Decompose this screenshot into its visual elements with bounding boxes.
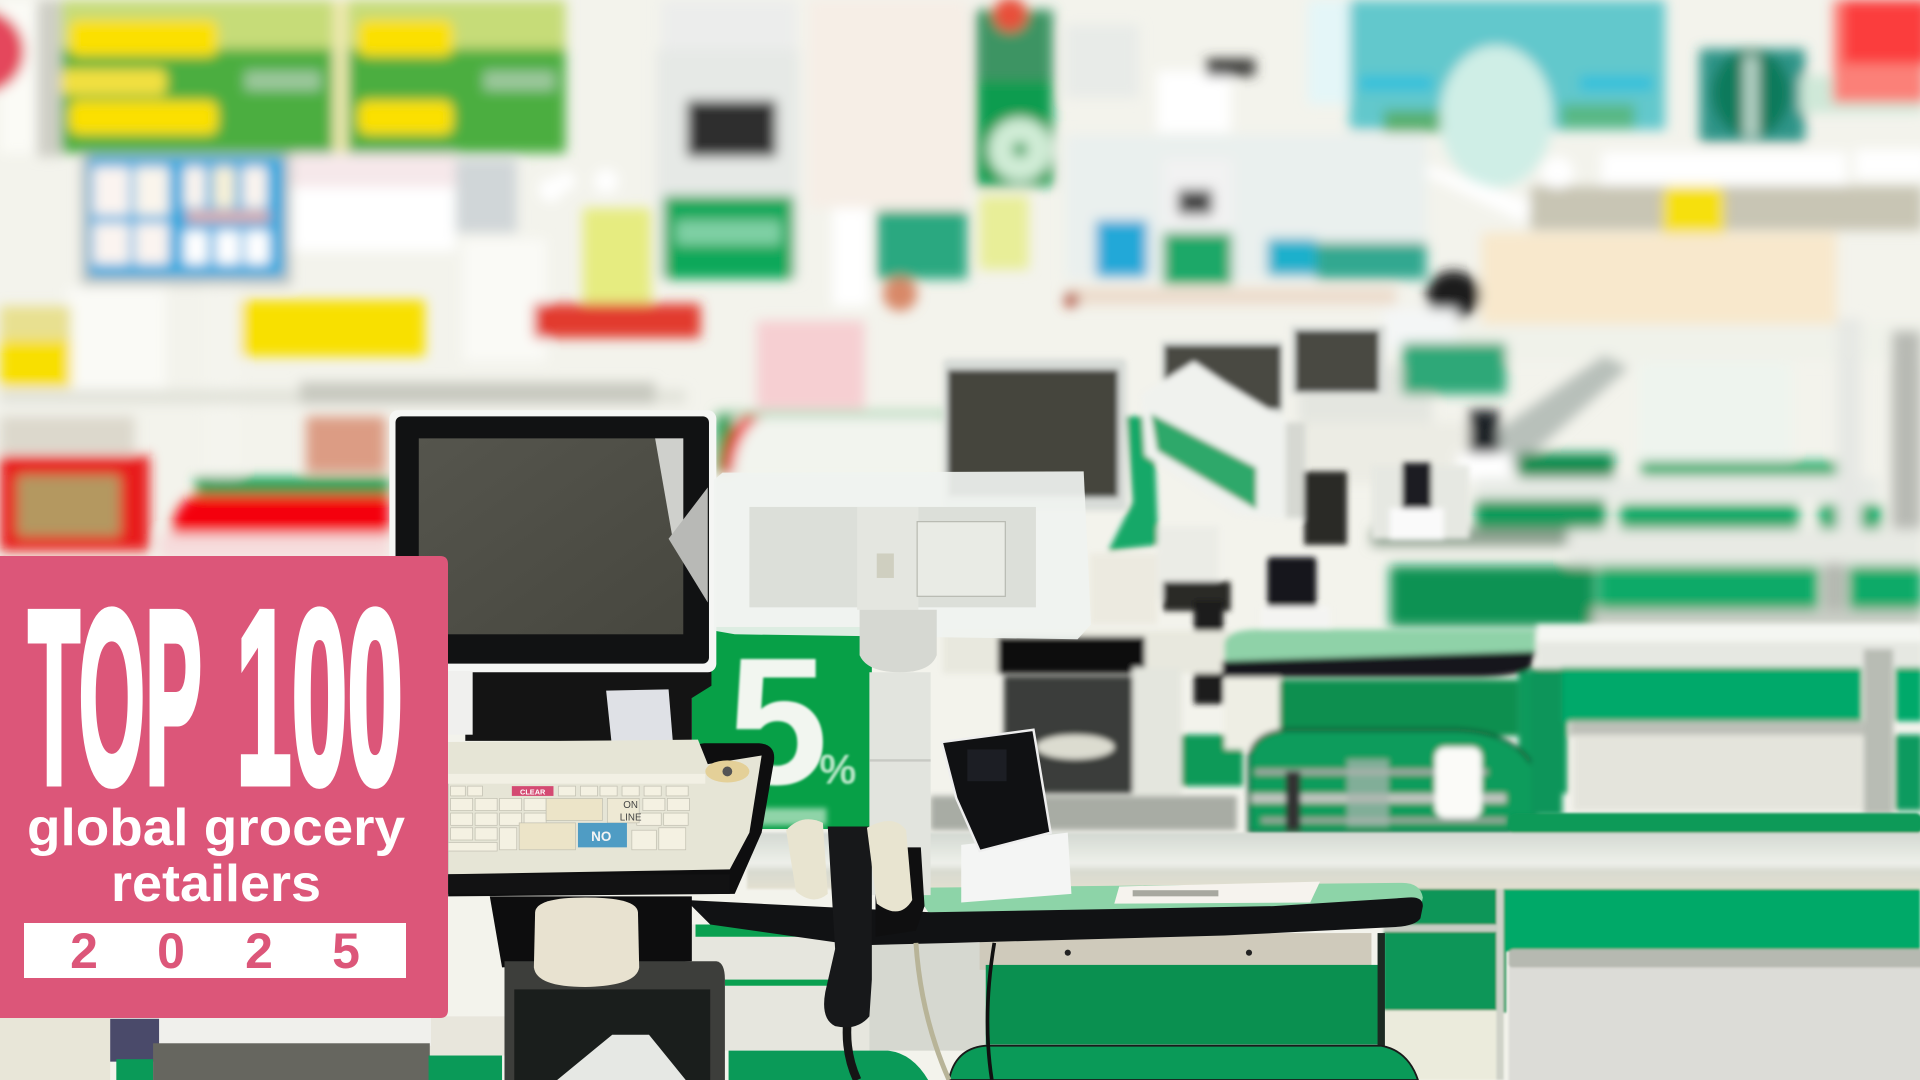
second counter — [931, 629, 1567, 830]
left hanging signs — [0, 0, 566, 157]
receipt scanner and paper roll — [504, 898, 725, 1080]
green 5% promo board: % — [819, 746, 856, 793]
mid-distance counters — [931, 326, 1920, 833]
keypad keys — [448, 786, 689, 851]
green 5% promo board: 5 — [727, 621, 828, 823]
silver rail — [747, 833, 1920, 889]
blurred store background — [0, 0, 1920, 627]
third lane scanner — [1163, 557, 1330, 704]
blue promo sign — [81, 153, 291, 285]
year strip: 5 — [332, 923, 360, 979]
lane panel — [1384, 813, 1920, 1080]
main monitor — [389, 410, 716, 749]
badge panel — [0, 556, 448, 1018]
subheading — [27, 799, 405, 913]
front-right lane upper — [1531, 624, 1920, 816]
keyboard terminal: ON — [623, 800, 638, 811]
pole customer display — [714, 471, 1091, 895]
year strip: 2 — [245, 923, 273, 979]
subheading: global grocery — [27, 799, 405, 857]
ceiling lights and top-right signs — [1157, 0, 1920, 242]
white glow and lights — [67, 153, 651, 484]
lower centre background — [0, 924, 986, 1080]
first counter — [686, 882, 1423, 1080]
centre hanging sign — [656, 0, 967, 311]
keyboard terminal — [448, 740, 774, 967]
promo board behind monitor — [716, 411, 949, 473]
badge: TOP 100 global grocery retailers 2025: 100 — [236, 558, 403, 836]
green pillar and tilted display — [1090, 361, 1469, 624]
year strip: 2 — [70, 923, 98, 979]
red counter behind monitor — [159, 478, 389, 558]
foreground rail and lower-right lane — [747, 813, 1920, 1080]
distant hanging promo signs — [1064, 135, 1920, 361]
heading: TOP 100: TOP — [28, 558, 202, 836]
third and fourth monitors — [1161, 326, 1386, 414]
subheading: retailers — [111, 855, 321, 913]
year strip — [24, 923, 406, 979]
keyboard terminal: NO — [591, 829, 611, 844]
year strip: 0 — [157, 923, 185, 979]
key labels: CLEAR — [520, 788, 546, 797]
green banner with disc — [976, 0, 1139, 269]
yellow shelves and red packs — [0, 300, 864, 551]
green 5% promo board — [692, 621, 872, 829]
card reader on stand — [942, 730, 1071, 902]
barcode scanner and cables — [786, 819, 994, 1080]
badge: TOP 100 global grocery retailers 2025 — [0, 556, 448, 1018]
keyboard terminal: LINE — [620, 812, 642, 823]
distant lanes — [1298, 309, 1920, 627]
shopping cart rack — [1249, 730, 1536, 833]
second monitor — [943, 359, 1127, 511]
